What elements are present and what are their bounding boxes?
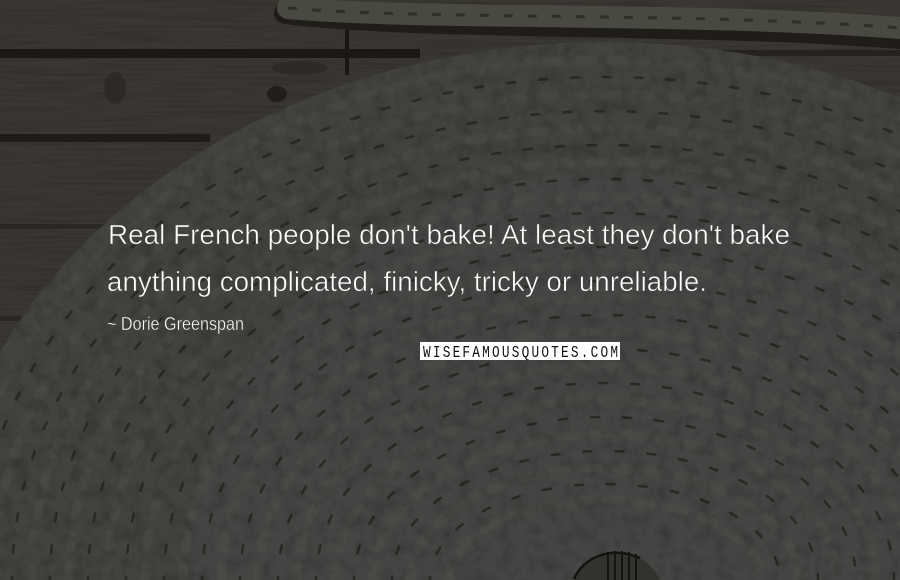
quote text: anything complicated, finicky, tricky or unreliable. [107, 266, 707, 297]
quote text [107, 219, 790, 297]
rope end along the top edge [285, 8, 900, 38]
watermark badge: WISEFAMOUSQUOTES.COM [423, 342, 618, 363]
quote text: Real French people don't bake! At least they don't bake [108, 219, 790, 250]
icon: dark rope eye at coil centre [574, 551, 660, 580]
author attribution: ~ Dorie Greenspan [107, 314, 244, 334]
